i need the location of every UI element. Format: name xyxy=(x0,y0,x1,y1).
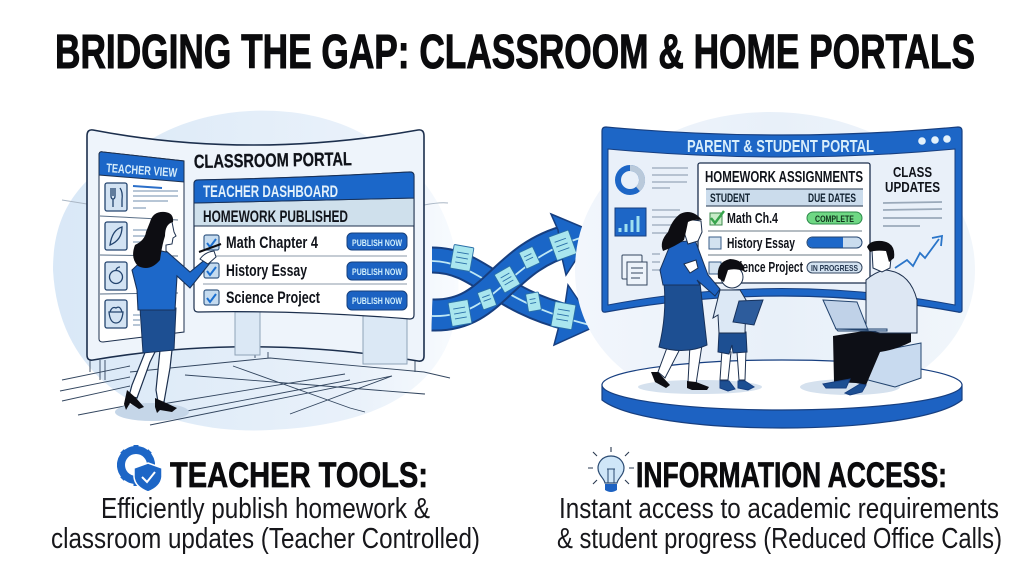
class updates block xyxy=(883,164,942,268)
window dots xyxy=(918,135,951,145)
class updates block: UPDATES xyxy=(885,179,940,196)
widget text lines xyxy=(652,168,688,270)
homework assignments card xyxy=(698,163,870,283)
table rows: Science Project xyxy=(727,259,803,276)
teacher figure xyxy=(115,212,221,421)
flowing documents xyxy=(448,230,577,330)
publish buttons xyxy=(347,233,407,310)
legs and shoes xyxy=(658,345,702,384)
portal screen frame xyxy=(602,127,962,312)
portal heading: PARENT & STUDENT PORTAL xyxy=(687,136,874,156)
blouse xyxy=(660,240,720,296)
background blob right xyxy=(575,112,975,415)
row dividers xyxy=(203,256,407,284)
row labels xyxy=(226,233,320,307)
hair xyxy=(662,212,702,251)
teacher tools heading: TEACHER TOOLS: xyxy=(170,456,428,495)
skirt xyxy=(140,308,176,353)
publish buttons: PUBLISH NOW xyxy=(352,267,402,278)
father figure xyxy=(823,241,921,395)
caption: information access xyxy=(557,447,1002,555)
publish buttons: PUBLISH NOW xyxy=(352,238,402,249)
class updates block: CLASS xyxy=(893,164,932,181)
raised round platform xyxy=(602,360,962,428)
teacher view panel xyxy=(99,152,184,342)
checkboxes xyxy=(204,235,219,305)
dashboard heading: TEACHER DASHBOARD xyxy=(203,182,338,201)
legs xyxy=(129,350,172,402)
row labels: History Essay xyxy=(226,261,307,280)
doors seen through the board xyxy=(235,312,407,364)
row labels: Science Project xyxy=(226,288,320,307)
bar chart tile xyxy=(615,208,646,236)
child figure xyxy=(713,259,763,391)
teacher tools description: classroom updates (Teacher Controlled) xyxy=(51,523,480,555)
hair xyxy=(867,241,894,262)
curved wall board xyxy=(87,130,424,361)
shirt xyxy=(713,290,746,333)
table rows: Math Ch.4 xyxy=(727,210,778,227)
row labels: Math Chapter 4 xyxy=(226,233,318,252)
panel: parent and student portal scene xyxy=(575,112,975,428)
seat box xyxy=(868,343,921,387)
table rows: IN PROGRESS xyxy=(811,263,858,273)
table header: STUDENT xyxy=(710,191,750,205)
icon: gear and shield xyxy=(117,445,162,492)
mother figure xyxy=(651,212,720,390)
homework rows xyxy=(204,233,407,310)
teacher tools description xyxy=(51,493,480,555)
hair xyxy=(133,212,173,268)
hand with pen xyxy=(200,251,216,264)
homework published heading: HOMEWORK PUBLISHED xyxy=(203,207,348,226)
classroom floor xyxy=(60,200,450,425)
donut chart xyxy=(618,168,642,192)
homework heading: HOMEWORK ASSIGNMENTS xyxy=(705,169,863,186)
head xyxy=(684,219,702,244)
caption: teacher tools xyxy=(51,445,480,555)
teacher dashboard card xyxy=(194,172,414,319)
portal screen interior xyxy=(608,149,955,305)
background blob left xyxy=(53,111,458,430)
teacher view text lines xyxy=(100,186,178,325)
teacher view label: TEACHER VIEW xyxy=(106,161,178,180)
classroom portal heading: CLASSROOM PORTAL xyxy=(194,149,352,173)
shorts xyxy=(718,332,747,354)
shoes xyxy=(823,379,866,395)
skirt xyxy=(659,283,707,351)
table rows: History Essay xyxy=(727,235,795,252)
head xyxy=(872,248,892,272)
panel: classroom portal scene xyxy=(53,111,458,430)
hand on chest xyxy=(684,260,698,273)
teacher tools description: Efficiently publish homework & xyxy=(101,493,430,525)
high heel shoes xyxy=(124,390,177,413)
figure shadows xyxy=(638,380,762,394)
trend arrow xyxy=(895,236,942,268)
trousers xyxy=(833,330,911,385)
tablet xyxy=(733,300,763,325)
face xyxy=(157,222,176,252)
table rows: COMPLETE xyxy=(815,214,854,224)
arrows: two crossing flows xyxy=(432,214,596,345)
information access description xyxy=(557,493,1002,555)
left widgets xyxy=(615,168,688,285)
head xyxy=(721,266,743,288)
update text lines xyxy=(883,202,942,226)
publish buttons: PUBLISH NOW xyxy=(352,296,402,307)
floor shadow xyxy=(115,403,189,421)
table header: DUE DATES xyxy=(808,191,856,205)
hair xyxy=(718,259,744,282)
blazer xyxy=(132,250,210,310)
sweater xyxy=(866,270,917,333)
folder icon xyxy=(622,255,647,285)
table header xyxy=(706,189,863,206)
table rows xyxy=(708,210,862,276)
icon: light bulb xyxy=(588,447,634,492)
arrow: classroom to home xyxy=(432,260,596,345)
legs and shoes xyxy=(720,350,746,380)
arrow: home to classroom xyxy=(432,214,594,316)
teacher view icon tiles xyxy=(105,183,127,328)
laptop xyxy=(823,300,887,331)
